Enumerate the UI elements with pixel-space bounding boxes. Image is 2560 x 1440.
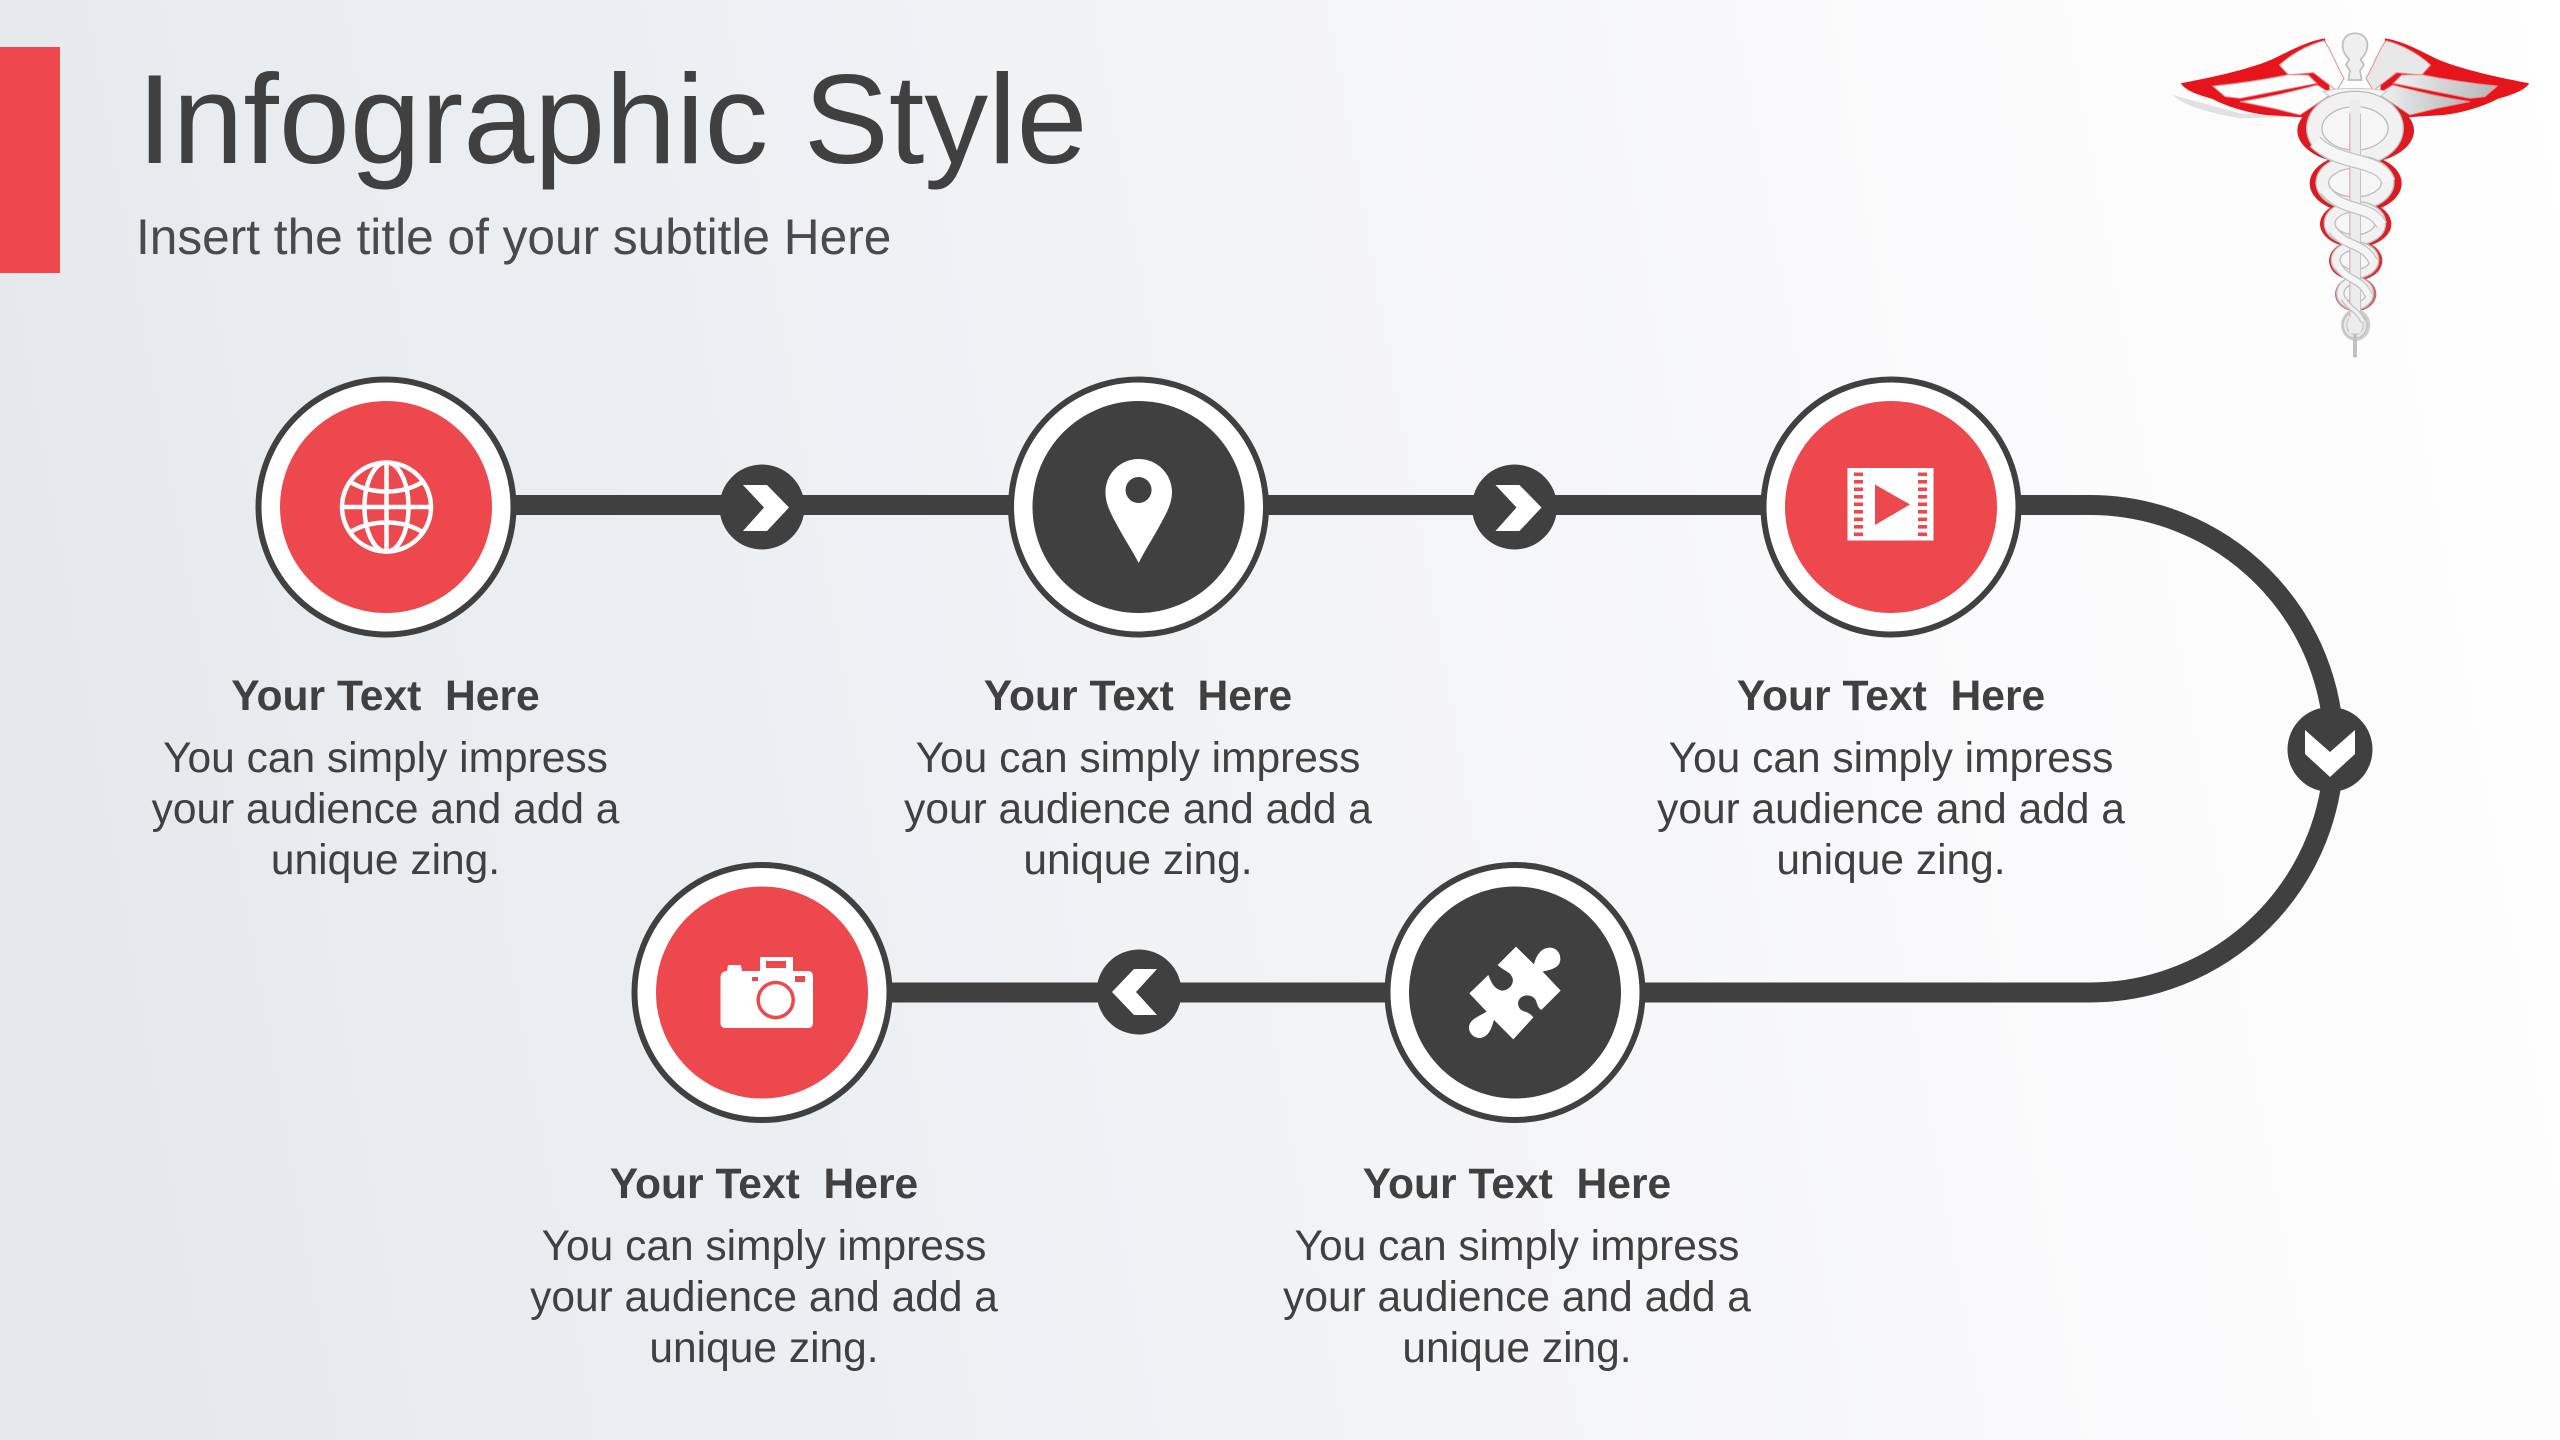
step 3 text: unique zing. (1776, 837, 2006, 884)
step 4 text (1283, 1160, 1751, 1372)
serpent coils (2297, 97, 2414, 341)
step 2 text (904, 672, 1372, 884)
step 4 text: You can simply impress (1295, 1223, 1739, 1270)
step 5 text: your audience and add a (530, 1274, 998, 1321)
step 3 text: You can simply impress (1669, 735, 2113, 782)
icon: puzzle piece (1469, 947, 1561, 1039)
step 2 text: You can simply impress (916, 735, 1360, 782)
step 3 text: your audience and add a (1657, 786, 2125, 833)
step 4 text: your audience and add a (1283, 1274, 1751, 1321)
step 5 text (530, 1160, 998, 1372)
title: Infographic Style (137, 48, 1087, 191)
icon: camera (720, 957, 813, 1028)
step 2 text: unique zing. (1023, 837, 1253, 884)
step 3 text: Your Text Here (1737, 672, 2045, 720)
staff head (2323, 33, 2387, 102)
serpent crossings (2315, 142, 2388, 322)
chevron arrow 3 (2288, 707, 2372, 792)
connector path (516, 505, 2334, 992)
step 5 text: Your Text Here (610, 1160, 918, 1208)
chevron arrow 4 (1096, 950, 1182, 1034)
step 5 node: camera (634, 865, 890, 1120)
step 2 text: Your Text Here (984, 672, 1292, 720)
step 1 text: your audience and add a (152, 786, 620, 833)
step 3 text (1657, 672, 2125, 884)
icon: film play (1848, 468, 1934, 540)
icon: globe (342, 462, 431, 552)
right wing (2366, 38, 2529, 117)
step 2 node: location pin (1011, 380, 1266, 634)
step 4 text: Your Text Here (1363, 1160, 1671, 1208)
icon: map pin (1106, 459, 1172, 563)
chevron arrow 1 (720, 464, 804, 550)
wing shadow (2173, 95, 2300, 118)
icon: caduceus medical logo (2173, 33, 2529, 357)
step 3 node: video (1764, 380, 2018, 634)
step 1 text: You can simply impress (163, 735, 608, 782)
subtitle: Insert the title of your subtitle Here (136, 209, 891, 265)
step 5 text: unique zing. (649, 1325, 879, 1372)
accent bar (0, 47, 60, 273)
step 2 text: your audience and add a (904, 786, 1372, 833)
chevron arrow 2 (1472, 464, 1557, 550)
step 4 text: unique zing. (1402, 1325, 1632, 1372)
step 1 node: globe (258, 380, 514, 634)
step 1 text: unique zing. (271, 837, 500, 884)
step 1 text: Your Text Here (231, 672, 540, 720)
staff (2349, 100, 2361, 357)
step 4 node: puzzle (1388, 865, 1642, 1120)
step 5 text: You can simply impress (542, 1223, 986, 1270)
left wing (2181, 38, 2344, 117)
step 1 text (152, 672, 620, 884)
